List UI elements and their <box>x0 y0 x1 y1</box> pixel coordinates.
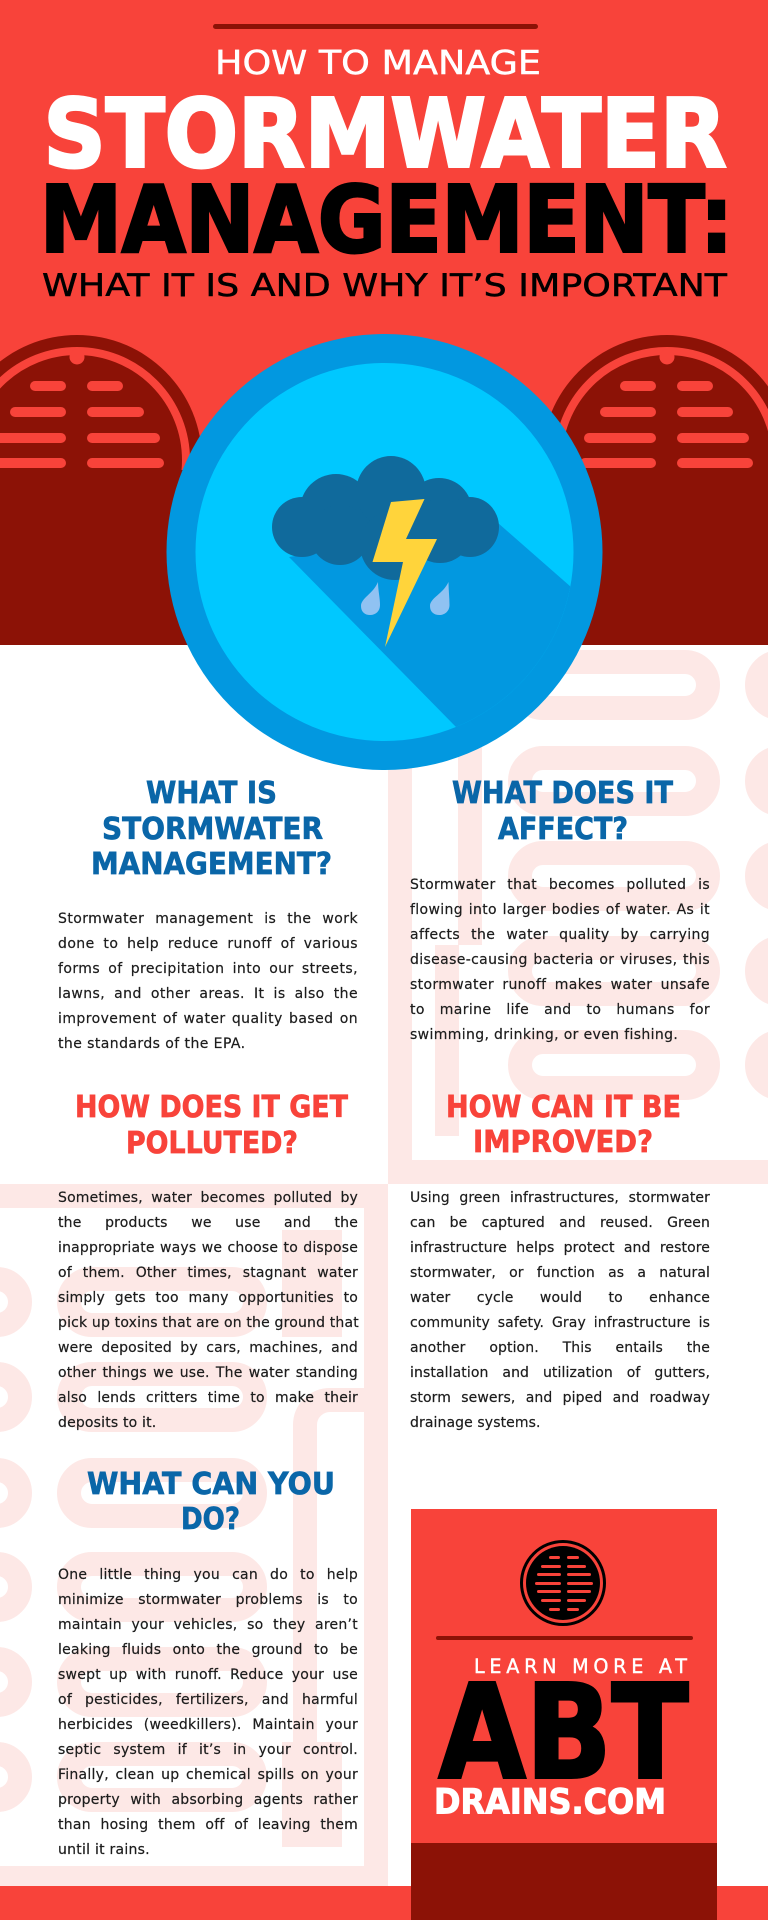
body text: improvement of water quality based on <box>58 1011 358 1027</box>
body text: the products we use and the <box>58 1215 358 1231</box>
heading <box>452 776 674 847</box>
panel: what can you do <box>58 1467 358 1858</box>
body text: Finally, clean up chemical spills on your <box>58 1767 358 1783</box>
body text: pick up toxins that are on the ground that <box>58 1315 359 1331</box>
body text: another option. This entails the <box>410 1340 710 1356</box>
body text: Stormwater that becomes polluted is <box>410 877 710 893</box>
heading: MANAGEMENT? <box>91 847 332 882</box>
heading: IMPROVED? <box>473 1125 653 1160</box>
body text: inappropriate ways we choose to dispose <box>58 1240 358 1256</box>
body text: infrastructure helps protect and restore <box>410 1240 710 1256</box>
body text <box>410 1190 710 1431</box>
heading <box>75 1090 348 1161</box>
body text: the standards of the EPA. <box>58 1036 246 1052</box>
body text <box>58 1190 359 1431</box>
heading: WHAT CAN YOU <box>87 1467 335 1502</box>
body text: swimming, drinking, or even fishing. <box>410 1027 678 1043</box>
call to action text: LEARN MORE AT <box>474 1655 687 1678</box>
body text: storm sewers, and piped and roadway <box>410 1390 710 1406</box>
body text: stormwater, or function as a natural <box>410 1265 710 1281</box>
body text: affects the water quality by carrying <box>410 927 710 943</box>
body text: installation and utilization of gutters, <box>410 1365 710 1381</box>
body text: leaking fluids onto the ground to be <box>58 1642 358 1658</box>
title: WHAT IT IS AND WHY IT’S IMPORTANT <box>42 268 728 304</box>
hero storm badge <box>166 334 602 770</box>
body text: were deposited by cars, machines, and <box>58 1340 358 1356</box>
icon: drain cover <box>522 1542 604 1624</box>
body text: Using green infrastructures, stormwater <box>410 1190 710 1206</box>
body text: of pesticides, fertilizers, and harmful <box>58 1692 358 1708</box>
bottom red band <box>0 1886 768 1920</box>
body text: Stormwater management is the work <box>58 911 358 927</box>
body text <box>410 877 710 1043</box>
heading: HOW CAN IT BE <box>446 1090 681 1125</box>
call to action text: DRAINS.COM <box>434 1782 666 1822</box>
background pattern: upper right <box>400 662 768 1172</box>
body text: herbicides (weedkillers). Maintain your <box>58 1717 358 1733</box>
body text: disease-causing bacteria or viruses, this <box>410 952 710 968</box>
body text <box>58 1567 358 1858</box>
background pattern: lower left <box>0 1196 388 1886</box>
body text: swept up with runoff. Reduce your use <box>58 1667 358 1683</box>
body text: septic system if it’s in your control. <box>58 1742 358 1758</box>
body text: can be captured and reused. Green <box>410 1215 710 1231</box>
top rule <box>213 24 538 29</box>
heading: WHAT IS <box>146 776 277 811</box>
heading: AFFECT? <box>498 812 628 847</box>
body text: water cycle would to enhance <box>410 1290 710 1306</box>
heading <box>446 1090 681 1160</box>
body text: flowing into larger bodies of water. As it <box>410 902 710 918</box>
body text: One little thing you can do to help <box>58 1567 358 1583</box>
heading: POLLUTED? <box>126 1126 298 1161</box>
body text: done to help reduce runoff of various <box>58 936 358 952</box>
icon: storm cloud <box>272 456 499 580</box>
heading: HOW DOES IT GET <box>75 1090 348 1125</box>
body text: simply gets too many opportunities to <box>58 1290 358 1306</box>
icon: left rain drop <box>361 582 380 615</box>
call to action text: ABT <box>438 1656 689 1808</box>
panel: what is stormwater management <box>58 776 358 1052</box>
title: HOW TO MANAGE <box>215 43 541 82</box>
body text: forms of precipitation into our streets, <box>58 961 358 977</box>
panel: how can it be improved <box>410 1090 710 1431</box>
body text: community safety. Gray infrastructure is <box>410 1315 710 1331</box>
body text: deposits to it. <box>58 1415 156 1431</box>
heading: WHAT DOES IT <box>452 776 673 811</box>
body text: also lends critters time to make their <box>58 1390 358 1406</box>
body text: than hosing them off of leaving them <box>58 1817 358 1833</box>
body text <box>58 911 358 1052</box>
body text: to marine life and to humans for <box>410 1002 710 1018</box>
heading: STORMWATER <box>102 812 323 847</box>
icon: lightning bolt <box>372 499 437 647</box>
body text: maintain your vehicles, so they aren’t <box>58 1617 358 1633</box>
body text: of them. Other times, stagnant water <box>58 1265 358 1281</box>
manhole: left <box>0 335 202 585</box>
dark red band <box>0 470 768 645</box>
icon: right rain drop <box>430 582 450 615</box>
body text: drainage systems. <box>410 1415 541 1431</box>
title <box>40 43 733 304</box>
body text: until it rains. <box>58 1842 150 1858</box>
body text: stormwater runoff makes water unsafe <box>410 977 710 993</box>
body text: other things we use. The water standing <box>58 1365 358 1381</box>
body text: lawns, and other areas. It is also the <box>58 986 358 1002</box>
heading <box>87 1467 335 1537</box>
panel: how does it get polluted <box>58 1090 359 1431</box>
body text: minimize stormwater problems is to <box>58 1592 358 1608</box>
panel: call to action <box>411 1509 717 1920</box>
heading <box>91 776 332 882</box>
panel: what does it affect <box>410 776 710 1043</box>
body text: property with absorbing agents rather <box>58 1792 358 1808</box>
heading: DO? <box>181 1502 240 1537</box>
body text: Sometimes, water becomes polluted by <box>58 1190 358 1206</box>
manhole: right <box>542 335 768 585</box>
header background <box>0 0 768 645</box>
